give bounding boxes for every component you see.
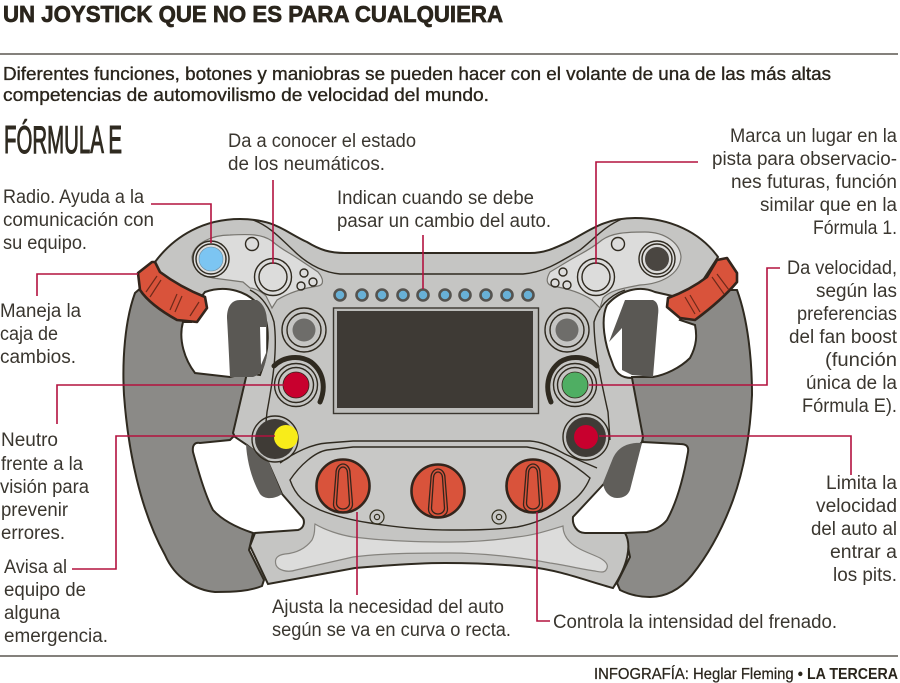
label: fan boost: del fan boost [789,327,898,348]
right rear paddle [609,300,658,377]
label: fan boost [787,258,898,417]
label: gearbox: cambios. [0,347,76,368]
screws [370,510,506,524]
credit [594,664,898,683]
label: neutral [0,430,89,544]
label: radio: comunicación con [3,210,154,231]
right switch panel [547,232,681,308]
right crank [667,258,737,320]
label: track marker: Marca un lugar en la [730,126,897,147]
label: radio [3,187,154,254]
left grip [123,280,264,592]
right dial [506,460,560,512]
right top dark button [639,241,675,277]
label: curve adjustment: según se va en curva o recta. [272,620,511,641]
label: emergency: emergencia. [4,626,108,647]
label: tyre state: de los neumáticos. [228,154,385,175]
label: pit limiter: entrar a [830,542,897,563]
lower console oval [290,447,590,530]
label: shift lights [337,188,551,232]
label: fan boost: Da velocidad, [787,258,897,279]
screen [334,308,538,414]
marker button [578,258,614,296]
label: radio: Radio. Ayuda a la [3,187,144,208]
lower console outer line [280,441,597,468]
shift LEDs [334,290,534,300]
label: fan boost: según las [816,281,897,302]
title: UN JOYSTICK QUE NO ES PARA CUALQUIERA [3,1,503,27]
intro text [3,64,831,105]
label: pit limiter: del auto al [811,519,897,540]
label: brake intensity: Controla la intensidad del frenado. [553,612,837,633]
label: gearbox: caja de [0,324,58,345]
fan boost button [548,357,597,406]
label: track marker: similar que en la [760,195,897,216]
label: tyre state [228,131,416,175]
label: fan boost: única de la [806,373,897,394]
intro text: Diferentes funciones, botones y maniobras se pueden hacer con el volante de una de las más altas [3,64,831,84]
label: pit limiter: Limita la [826,473,897,494]
lower trim plate [275,524,607,572]
small switches left [246,238,317,290]
radio button [193,241,229,277]
left lower paddle [246,444,282,498]
label: gearbox [0,301,81,368]
label: pit limiter [811,473,897,586]
credit: INFOGRAFÍA: Heglar Fleming • [594,664,803,683]
tyre button [254,258,292,296]
right lower paddle [603,443,642,498]
label: emergency: alguna [4,603,60,624]
leader lines [37,162,851,621]
label: emergency [4,557,108,647]
label: tyre state: Da a conocer el estado [228,131,416,152]
heading: Fórmula E: FÓRMULA E [4,119,122,162]
left rear paddle [227,300,267,377]
left dial [316,460,370,512]
label: fan boost: Fórmula E). [802,396,897,417]
label: neutral: errores. [1,523,65,544]
pit limiter button [563,414,609,460]
label: track marker: nes futuras, función [731,172,897,193]
label: neutral: frente a la [1,454,83,475]
small switches right [551,238,624,289]
intro text: competencias de automovilismo de velocidad del mundo. [3,85,489,105]
label: shift lights: Indican cuando se debe [337,188,534,209]
label: curve adjustment: Ajusta la necesidad del auto [272,597,504,618]
label: curve adjustment [272,597,511,641]
label: fan boost: (función [825,350,897,371]
right console edge [594,290,625,440]
label: emergency: equipo de [4,580,86,601]
label: track marker: pista para observacio- [712,149,897,170]
left console edge [250,290,275,432]
left grey knob [282,308,326,352]
upper console line [253,219,622,274]
right grip [617,290,752,597]
label: fan boost: preferencias [797,304,897,325]
label: pit limiter: los pits. [833,565,897,586]
label: pit limiter: velocidad [816,496,897,517]
label: neutral: Neutro [1,430,58,451]
label: neutral: prevenir [1,500,69,521]
steering wheel illustration [123,218,752,597]
emergency button [252,416,298,462]
label: radio: su equipo. [3,233,87,254]
centre dial [412,464,464,518]
neutral button [274,357,323,406]
left switch panel [192,235,322,308]
wheel body [155,218,718,588]
label: gearbox: Maneja la [0,301,81,322]
right grey knob [545,308,589,352]
label: neutral: visión para [0,477,89,498]
label: emergency: Avisa al [4,557,67,578]
label: shift lights: pasar un cambio del auto. [337,211,551,232]
left crank [138,262,207,322]
label: track marker [712,126,897,239]
